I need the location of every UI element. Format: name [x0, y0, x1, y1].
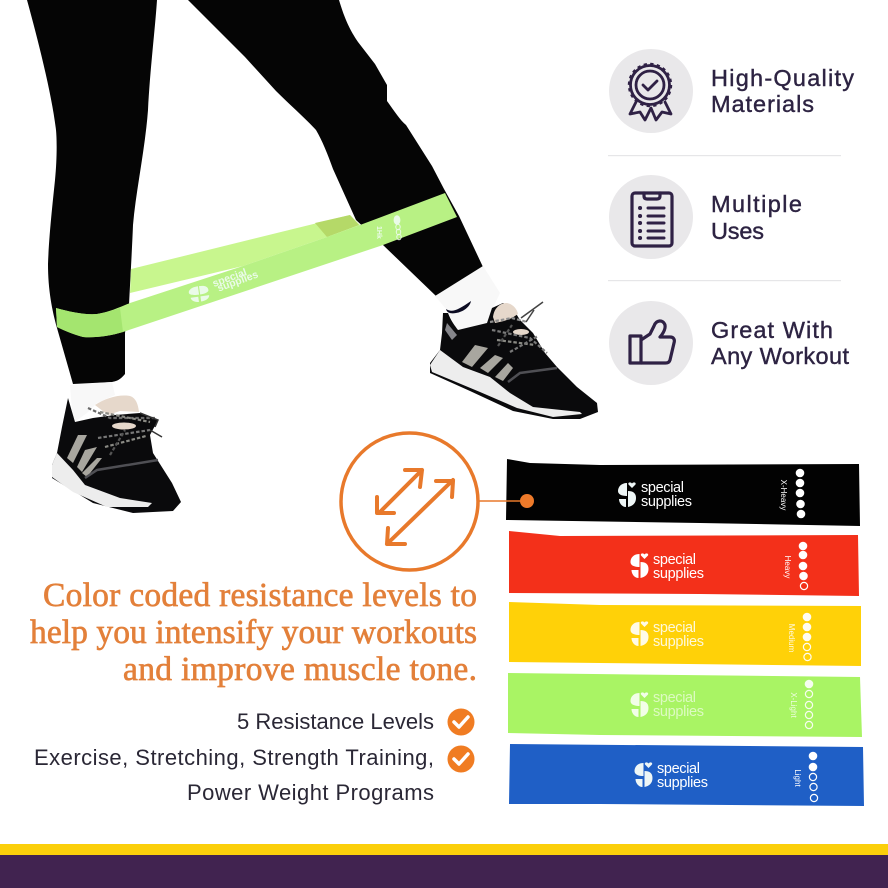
- tongue lower patch: [513, 329, 529, 335]
- logo text: supplies: [641, 494, 692, 510]
- lime band front strand: [56, 193, 457, 337]
- right leg: [188, 0, 483, 296]
- heading: Color coded resistance levels to: [43, 577, 477, 614]
- band: x-light green: [508, 673, 862, 737]
- text: Great With: [711, 317, 833, 343]
- level dots: [803, 613, 811, 661]
- lime band overlap patch: [315, 215, 359, 237]
- feature: multiple uses: [609, 175, 802, 259]
- level label: X-Heavy: [779, 480, 788, 510]
- band logo text: supplies: [216, 269, 260, 294]
- photo: legs with lime resistance band: [27, 0, 598, 513]
- icon circle: [609, 301, 693, 385]
- bands stack: [506, 459, 864, 806]
- feature: multiple uses: Uses: [711, 218, 764, 244]
- logo mark: [630, 621, 648, 646]
- text: Multiple: [711, 191, 802, 217]
- item text: 5 Resistance Levels: [237, 709, 434, 734]
- left sock: [70, 382, 115, 423]
- logo text: supplies: [657, 775, 708, 791]
- logo mark: [630, 553, 648, 578]
- feature: great with any workout: Any Workout: [711, 343, 849, 369]
- level dots: [809, 752, 818, 802]
- feature: high-quality materials: [609, 49, 854, 133]
- reflective line: [508, 368, 557, 382]
- logo text: supplies: [653, 634, 704, 650]
- nike swoosh: [446, 301, 471, 313]
- icon: award rosette: [629, 64, 671, 120]
- right sock: [435, 266, 500, 332]
- heading: and improve muscle tone.: [123, 651, 477, 688]
- icon: stretch arrows circle: [341, 433, 478, 570]
- tongue lower patch: [112, 422, 136, 430]
- right shoe: [430, 302, 598, 419]
- icon: clipboard: [632, 193, 672, 246]
- item text continued: Power Weight Programs: [187, 780, 434, 805]
- logo text: [657, 761, 708, 791]
- level dots: [796, 469, 805, 518]
- level label: Medium: [787, 624, 796, 653]
- logo text: special: [653, 552, 696, 568]
- midsole: [430, 350, 582, 417]
- stripes: [67, 435, 102, 477]
- upper: [430, 303, 598, 419]
- logo text: [653, 552, 704, 582]
- laces: [490, 302, 547, 353]
- logo text: [653, 620, 704, 650]
- feature: high-quality materials: Materials: [711, 91, 814, 117]
- tongue: [493, 303, 518, 323]
- logo mark: [618, 482, 636, 507]
- item icon: check: [448, 746, 474, 772]
- band: heavy red: [509, 531, 859, 596]
- divider: [608, 280, 841, 281]
- icon: thumbs up: [630, 321, 674, 363]
- heading: help you intensify your workouts: [30, 614, 477, 651]
- band level dots: [394, 215, 401, 240]
- upper: [52, 398, 181, 513]
- band: medium yellow: [509, 602, 861, 666]
- level dots: [799, 542, 808, 590]
- logo text: special: [653, 620, 696, 636]
- logo text: special: [641, 480, 684, 496]
- laces: [88, 408, 162, 455]
- band: x-heavy black: [506, 459, 860, 526]
- level dots: [805, 680, 813, 729]
- level label: Heavy: [783, 556, 792, 578]
- level label: Light: [793, 769, 802, 787]
- heading: [30, 577, 477, 688]
- callout connector: [479, 494, 534, 508]
- band logo mark: [188, 285, 210, 303]
- tongue: [95, 395, 139, 415]
- band shaded loop end: [56, 308, 123, 337]
- feature: great with any workout: [609, 301, 849, 385]
- lime band back strand: [130, 215, 360, 293]
- checklist: [34, 708, 474, 805]
- level label: X-Light: [789, 692, 798, 718]
- stripes: [462, 345, 513, 381]
- midsole: [52, 453, 152, 507]
- band level label: 1Hk: [375, 226, 382, 239]
- item text: Exercise, Stretching, Strength Training,: [34, 745, 434, 770]
- logo text: special: [653, 690, 696, 706]
- footer bar: [0, 844, 888, 888]
- divider: [608, 155, 841, 156]
- logo mark: [634, 762, 652, 787]
- heel panel: [445, 323, 457, 340]
- band logo text: special: [211, 266, 249, 290]
- reflective line: [85, 460, 158, 478]
- left leg: [27, 0, 157, 384]
- logo text: [641, 480, 692, 510]
- left shoe: [52, 395, 181, 513]
- logo text: supplies: [653, 704, 704, 720]
- text: High-Quality: [711, 65, 854, 91]
- logo text: [653, 690, 704, 720]
- icon circle: [609, 175, 693, 259]
- logo mark: [630, 692, 648, 717]
- logo text: special: [657, 761, 700, 777]
- icon circle: [609, 49, 693, 133]
- band: light blue: [509, 744, 864, 806]
- logo text: supplies: [653, 566, 704, 582]
- item icon: check: [448, 708, 474, 736]
